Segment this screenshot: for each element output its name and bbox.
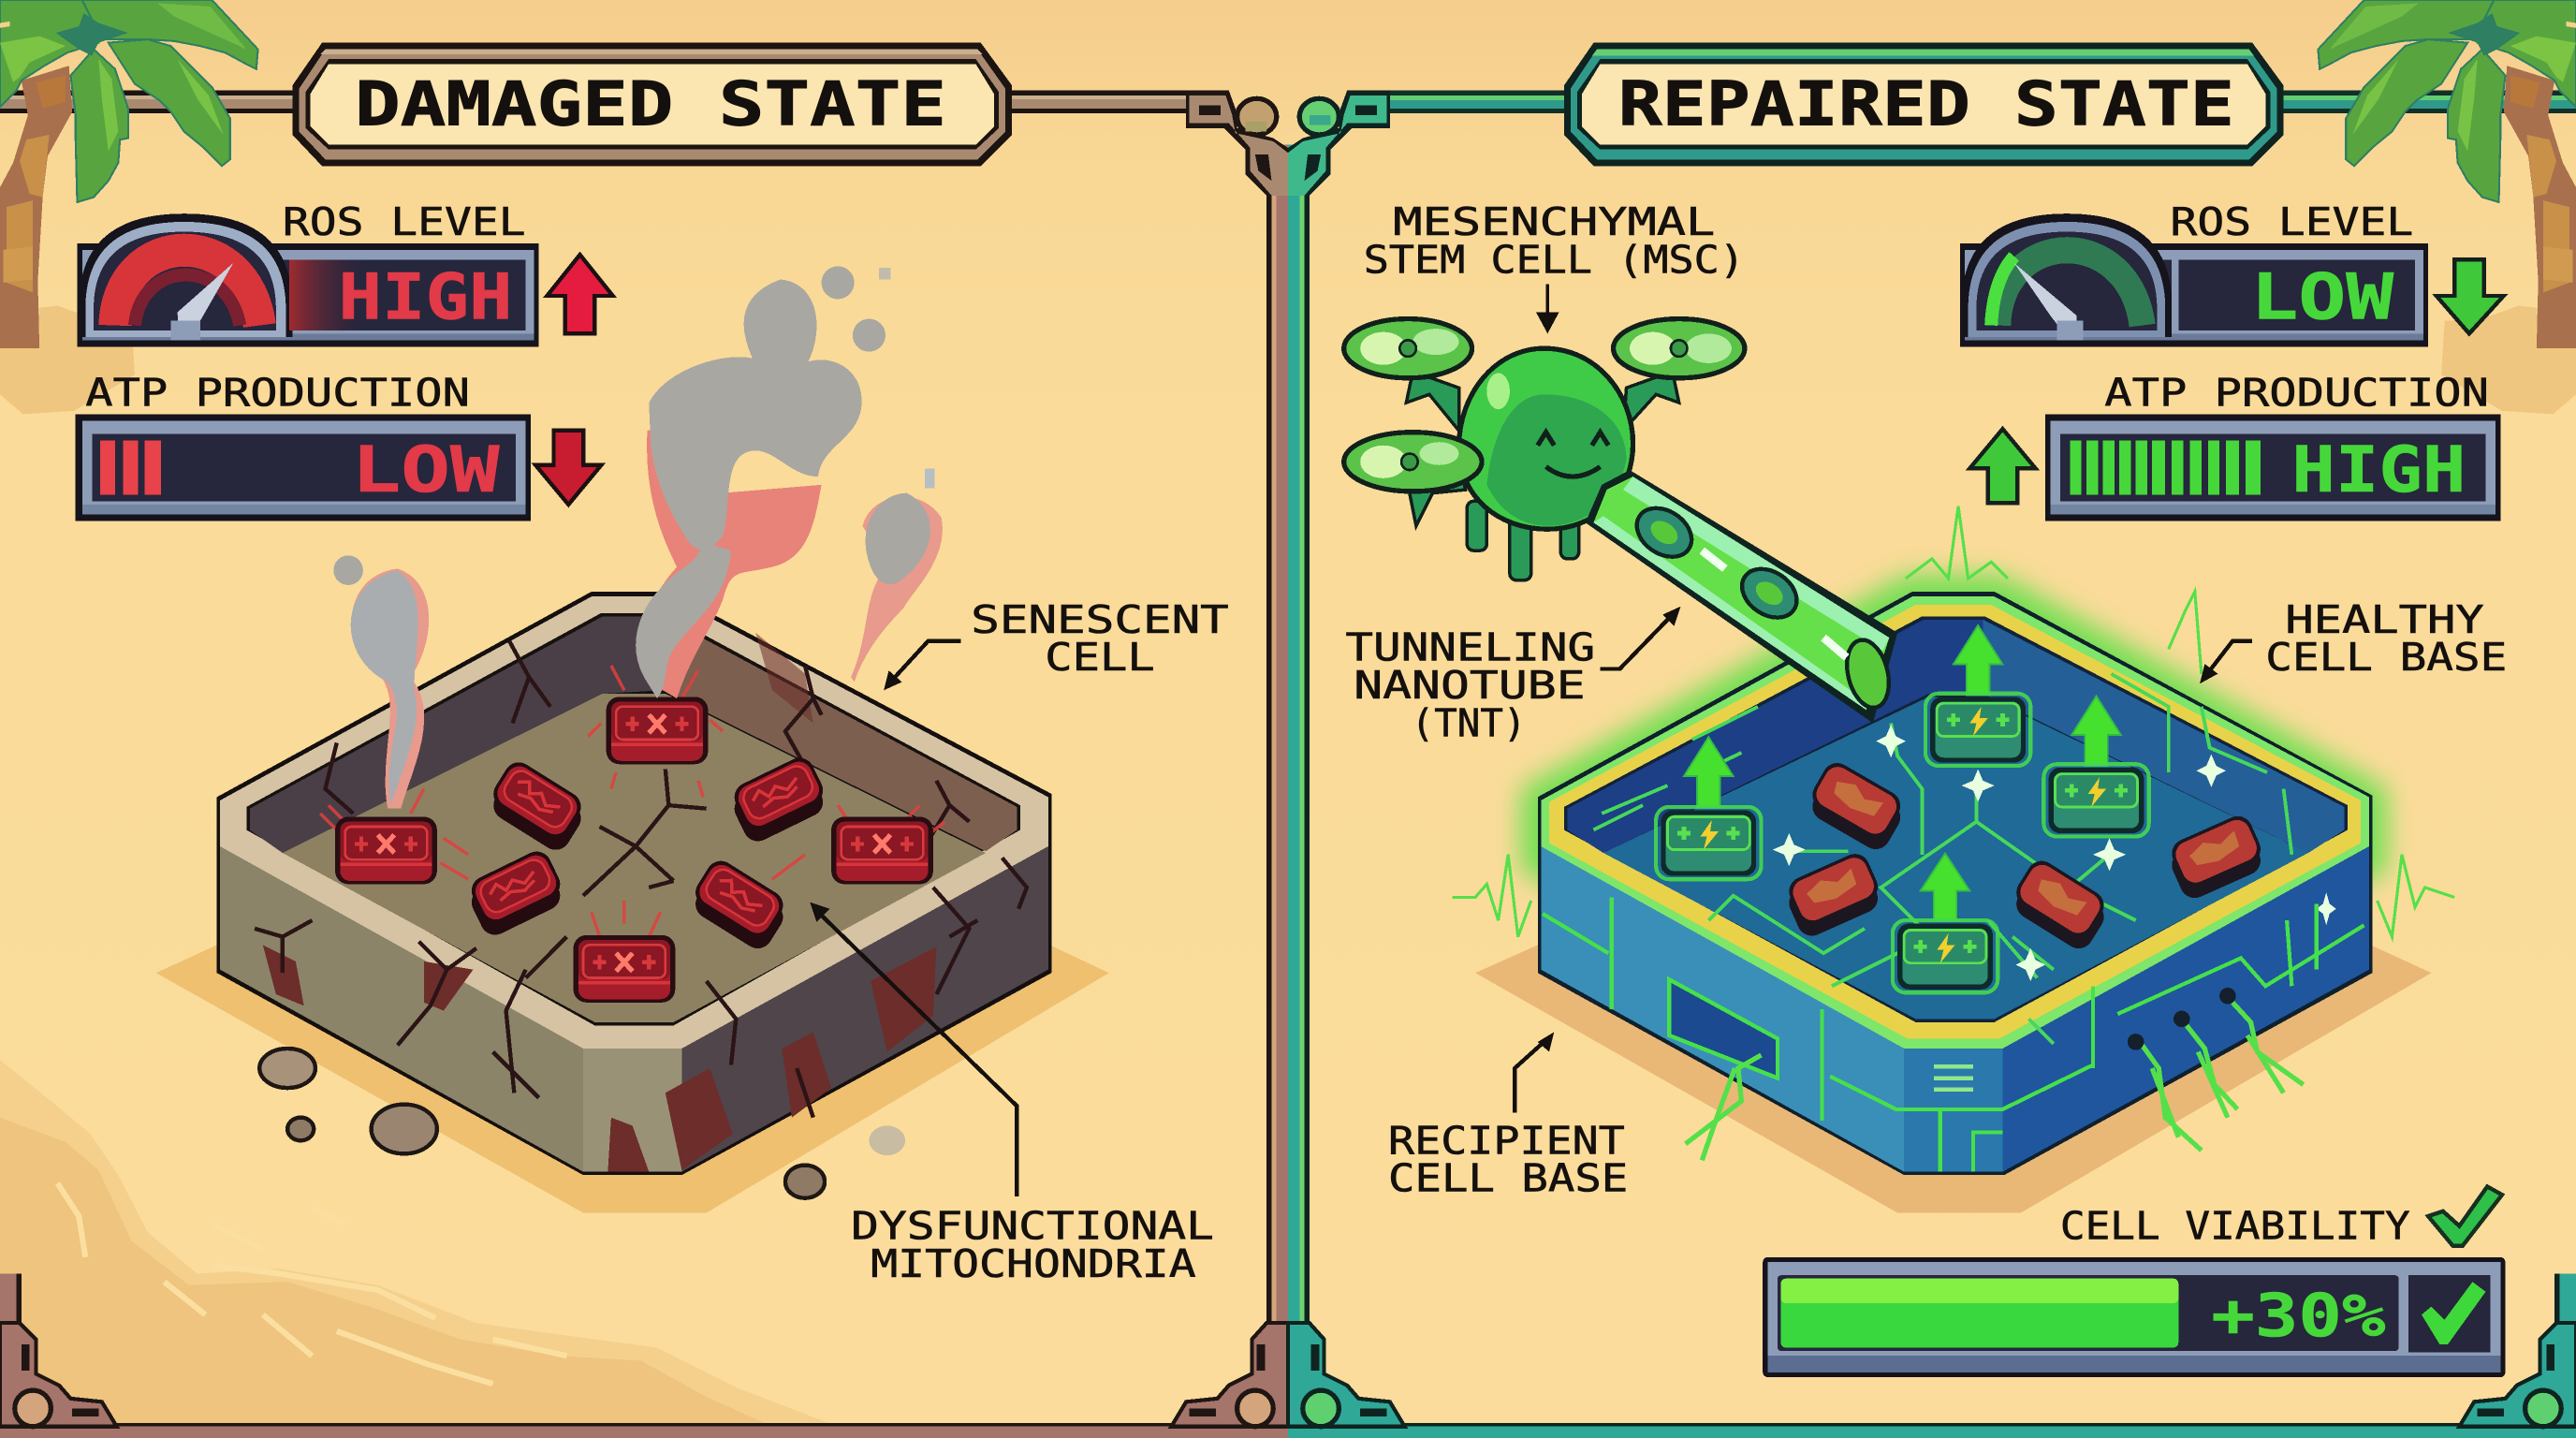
gauge: ros high: HIGH: [339, 260, 513, 334]
embers: [320, 657, 944, 937]
wall circuits: [1543, 897, 2364, 1172]
wall: front right: [2002, 846, 2369, 1172]
label: healthy cell base: HEALTHY: [2285, 597, 2484, 642]
healthy mitochondria with arrows: [1656, 625, 2149, 992]
gauge: ros low: LOW: [2250, 260, 2394, 334]
label: senescent cell: [884, 597, 1229, 690]
beach shoreline: [0, 1060, 838, 1427]
smoke plume left: [333, 555, 429, 809]
gauge: atp low: LOW: [352, 433, 500, 506]
label: cell viability: CELL VIABILITY: [2060, 1204, 2410, 1249]
sparkles: [1773, 725, 2336, 981]
label: atp production left: ATP PRODUCTION: [85, 371, 470, 416]
label: recipient cell base: RECIPIENT: [1388, 1118, 1625, 1163]
label: mesenchymal stem cell: [1364, 199, 1745, 333]
rotor: top left: [1344, 319, 1472, 378]
door: [1669, 979, 1778, 1078]
label: healthy cell base: [2200, 597, 2507, 683]
right panel frame: [1288, 91, 2576, 1438]
gauge: ros high: [77, 213, 539, 346]
label: mesenchymal stem cell: STEM CELL (MSC): [1364, 237, 1745, 282]
senescent cells: [607, 697, 708, 764]
icon: palm tree left: [0, 0, 258, 414]
outer silhouette: [217, 592, 1051, 1175]
mesenchymal stem cell drone: [1344, 319, 1745, 580]
label: dysfunctional mitochondria: MITOCHONDRIA: [871, 1241, 1196, 1286]
corner ornament: top: [1186, 91, 1288, 196]
smoke plume right: [851, 468, 943, 682]
title plate: damaged state: [292, 43, 1012, 166]
label: atp production right: ATP PRODUCTION: [2104, 371, 2489, 416]
healthy cell base: [1453, 506, 2454, 1213]
face: [1538, 433, 1608, 477]
arrow: ros down green: [2437, 259, 2504, 333]
label: ros level right: ROS LEVEL: [2170, 199, 2413, 244]
label: healthy cell base: CELL BASE: [2265, 635, 2507, 680]
corner ornament: bottom left: [1288, 1323, 1405, 1427]
label: mesenchymal stem cell: MESENCHYMAL: [1393, 199, 1715, 244]
label: tunneling nanotube: NANOTUBE: [1354, 663, 1586, 708]
rust patches: [263, 633, 936, 1172]
arrow: ros up red: [547, 255, 613, 333]
rim: [1541, 596, 2369, 1049]
cables: [1686, 1003, 2304, 1160]
damaged cell base: [156, 592, 1109, 1213]
wall: front center: [583, 1049, 681, 1172]
viability progress bar: +30%: [2211, 1281, 2385, 1350]
label: ros level left: ROS LEVEL: [283, 199, 526, 244]
label: tunneling nanotube: TUNNELING: [1345, 625, 1595, 670]
title plate: repaired state: REPAIRED STATE: [1618, 69, 2234, 139]
label: tunneling nanotube: [1345, 607, 1680, 745]
body: [1459, 348, 1633, 529]
back wall right: [662, 616, 1017, 851]
circuits: [1593, 674, 2291, 1044]
left panel frame: [0, 91, 1288, 1438]
title plate: repaired state: [1564, 43, 2284, 166]
cracks: [255, 641, 1027, 1118]
corner ornament: top: [1288, 91, 1390, 196]
corner ornament: bottom right: [1171, 1323, 1288, 1427]
rocks: [259, 1049, 905, 1198]
rotor: top right: [1614, 319, 1745, 378]
label: tunneling nanotube: (TNT): [1412, 700, 1526, 745]
smoke plume center: [636, 266, 890, 698]
icon: palm tree right: [2318, 0, 2576, 414]
label: recipient cell base: CELL BASE: [1388, 1156, 1628, 1201]
rim: [220, 596, 1048, 1049]
label: dysfunctional mitochondria: DYSFUNCTIONAL: [851, 1204, 1214, 1249]
tunneling nanotube: [1586, 470, 1897, 723]
title plate: damaged state: DAMAGED STATE: [355, 69, 946, 139]
ground shadow: [1475, 945, 2432, 1213]
vent: [1934, 1066, 1973, 1090]
dysfunctional mitochondria: [467, 753, 827, 954]
wall: front center: [1904, 1049, 2002, 1172]
corner ornament: bottom left: [0, 1323, 117, 1427]
legs: [1406, 372, 1679, 580]
back wall left: [1567, 620, 1983, 853]
gauge: atp high: [2045, 414, 2500, 521]
gauge: atp high: HIGH: [2291, 433, 2466, 506]
gauge: atp low: [76, 414, 531, 521]
label: dysfunctional mitochondria: [810, 902, 1214, 1286]
icon: viability check: [2428, 1186, 2502, 1246]
ground shadow: [156, 945, 1109, 1213]
viability progress bar: [1763, 1257, 2506, 1377]
outer silhouette: [1538, 592, 2372, 1175]
arrow: atp down red: [535, 431, 601, 505]
label: recipient cell base: [1388, 1032, 1628, 1201]
gauge: ros low: [1960, 213, 2428, 346]
wall: front left: [1541, 846, 1904, 1172]
bars: [100, 440, 161, 494]
floor: [1603, 697, 2308, 1019]
label: senescent cell: SENESCENT: [971, 597, 1229, 642]
arrow: atp up green: [1969, 429, 2036, 503]
floor: [283, 694, 986, 1022]
damaged mitochondria remaining: [1784, 757, 2265, 954]
rotor: lower left: [1344, 433, 1482, 492]
bars: [2070, 440, 2261, 494]
wall: front right: [681, 846, 1048, 1172]
wall: front left: [220, 846, 583, 1172]
back wall left: [250, 616, 662, 853]
label: senescent cell: CELL: [1045, 635, 1155, 680]
corner ornament: bottom right: [2459, 1323, 2576, 1427]
heartbeat sparks: [1453, 506, 2454, 937]
glow: [1521, 575, 2387, 1068]
back wall right: [1983, 620, 2345, 853]
